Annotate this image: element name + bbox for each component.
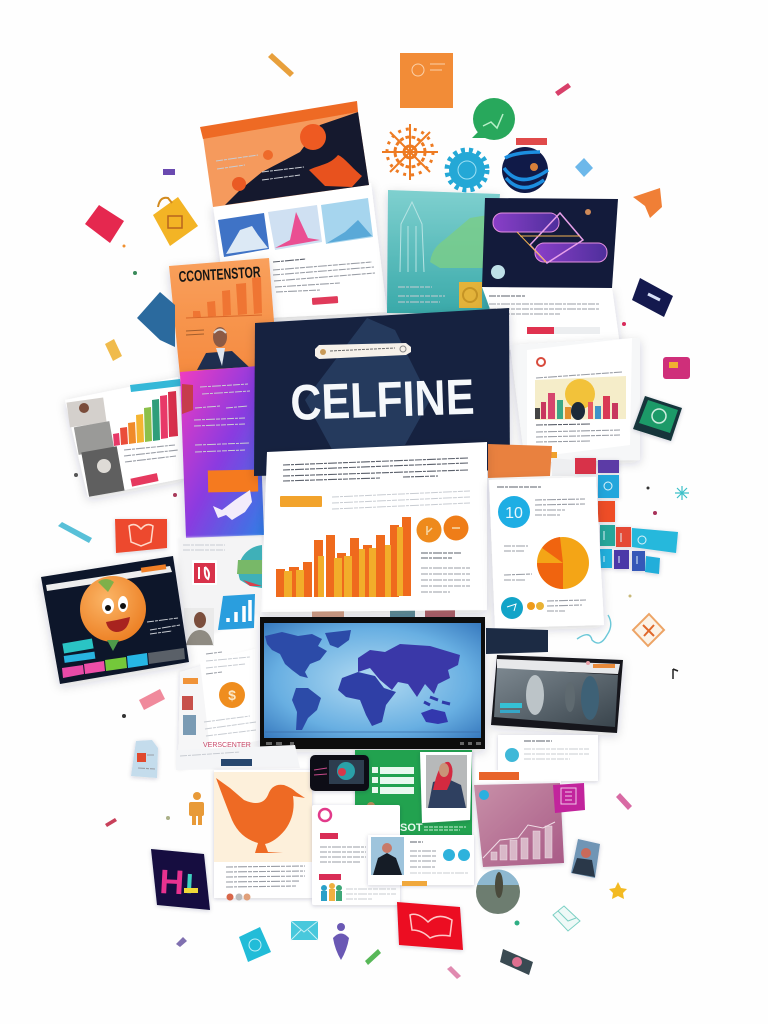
faded triangles <box>305 318 430 455</box>
icon: HI tile: H <box>159 863 185 902</box>
teal circle <box>501 597 544 619</box>
illustration <box>535 376 626 420</box>
thumbnail: blue city <box>218 213 269 257</box>
icon: green cube <box>633 396 682 441</box>
icon: red diamond <box>85 205 124 243</box>
colour bars <box>113 379 181 446</box>
heading: CELFINE: CELFINE <box>289 369 475 431</box>
icon: magenta tile <box>553 783 585 813</box>
illustration: orange bird <box>216 778 305 853</box>
icon: orange square <box>400 53 453 108</box>
panel: world map monitor <box>260 617 485 749</box>
panel: text card bottom right <box>498 735 598 781</box>
number circle <box>498 496 530 528</box>
icon: red logo card <box>192 560 217 585</box>
photos <box>67 397 125 497</box>
panel: orange strip behind report <box>488 444 575 478</box>
photo: circular landscape <box>476 870 520 914</box>
arrow: curved cyan <box>577 615 611 643</box>
presenter <box>197 327 249 370</box>
icon: outlined envelope <box>553 906 580 931</box>
icon: document <box>131 740 158 778</box>
panel: colour strip under report <box>312 608 455 620</box>
panel: photo info card <box>368 835 474 886</box>
icon: cyan pill <box>58 522 92 543</box>
icon: semi pie <box>237 545 262 588</box>
label text: SOT <box>400 822 423 834</box>
panel: teal chart card <box>387 190 500 314</box>
icon: music note <box>673 669 678 679</box>
icon: cyan envelope <box>291 921 318 940</box>
bar chart <box>276 517 411 597</box>
portrait <box>184 608 214 646</box>
panel: phone <box>310 755 369 791</box>
icon: green chat bubble <box>472 98 515 140</box>
thumbnail: blue chart <box>321 198 373 244</box>
panel: small video monitor <box>491 655 623 733</box>
icon: snowflake <box>675 486 689 500</box>
number circle: 10 <box>505 505 523 522</box>
icon: orange gear wheel <box>382 124 438 180</box>
search bar <box>315 343 411 359</box>
icon: green stick <box>365 949 381 965</box>
thumbnail: pink peaks <box>268 205 322 250</box>
icon: purple stick left <box>176 937 187 947</box>
icon: outlined diamond <box>633 614 664 646</box>
icon: yellow small <box>105 339 122 361</box>
panel: right pie infographic <box>489 477 604 628</box>
icon: red book card large <box>397 902 463 950</box>
icon: blue gear <box>447 150 487 190</box>
panel: dark small card behind monitor <box>486 628 548 654</box>
world map <box>265 630 460 730</box>
panel: small documents left of map <box>178 648 262 768</box>
white map blob <box>213 490 252 520</box>
icon: blue shard <box>137 292 175 347</box>
icon: pink stick <box>555 83 571 96</box>
icon: blue bars <box>218 594 255 630</box>
icon: red-blue card at left of bird <box>176 742 300 770</box>
icon: pink stick bottom <box>447 966 461 979</box>
icon: yellow bag <box>153 197 198 246</box>
icon: yellow stick <box>268 53 294 77</box>
panel: top left web page <box>200 101 387 320</box>
panel: colour tiles <box>575 458 678 574</box>
icon: purple tag <box>163 169 175 175</box>
icon: navy badge <box>632 278 673 317</box>
icon: pink dumbbell <box>105 818 117 827</box>
icon: gold star <box>609 882 627 899</box>
icon: blue diamond <box>575 158 593 177</box>
icon: pink bandage <box>139 689 165 710</box>
panel: left text card <box>312 805 400 905</box>
icon: orange star shape <box>633 188 662 218</box>
orange label <box>208 470 258 492</box>
coloured buttons <box>62 638 185 678</box>
panel: right text mini card <box>510 327 640 462</box>
panel: purple gradient card <box>180 366 264 538</box>
icon: photo tile <box>500 949 533 975</box>
panel: main CELFINE hero <box>254 308 510 476</box>
panel: green card <box>355 750 472 835</box>
icon: pink stick right <box>616 793 632 810</box>
pie chart <box>537 537 589 589</box>
bar chart <box>193 277 262 317</box>
icon: orange person <box>189 792 204 825</box>
icon: planet <box>502 138 548 193</box>
panel: CONTENSTOR orange card <box>169 258 278 376</box>
panel: orange face web card <box>41 556 189 684</box>
mascot <box>80 576 146 651</box>
orange circles <box>416 516 468 542</box>
article text <box>273 259 375 305</box>
panel: pink chart card <box>474 770 585 867</box>
panel: analytics report <box>261 442 487 612</box>
panel: portrait photo card <box>420 752 472 823</box>
icon: purple pin <box>333 923 349 960</box>
icon: people <box>321 883 342 901</box>
icon: teal tile <box>239 927 271 962</box>
small scattered dots <box>74 244 657 926</box>
panel: dark shapes card <box>482 198 620 350</box>
panel: middle left small cards <box>178 536 262 650</box>
heading: CONTENSTOR: CCONTENSTOR <box>178 264 261 286</box>
icon: HI tile <box>151 849 210 910</box>
icon: red book tile left <box>115 519 167 553</box>
photo: man tile <box>571 839 600 878</box>
panel: left mini report <box>65 377 186 497</box>
icon: HI tile: I <box>185 868 194 899</box>
icon: red-blue card at left of bird: VERSCENTER <box>203 742 251 749</box>
icon: pink tile <box>663 357 690 379</box>
panel: bird article <box>214 770 312 900</box>
hero banner <box>200 101 369 207</box>
icon: dollar badge: $ <box>228 687 236 703</box>
